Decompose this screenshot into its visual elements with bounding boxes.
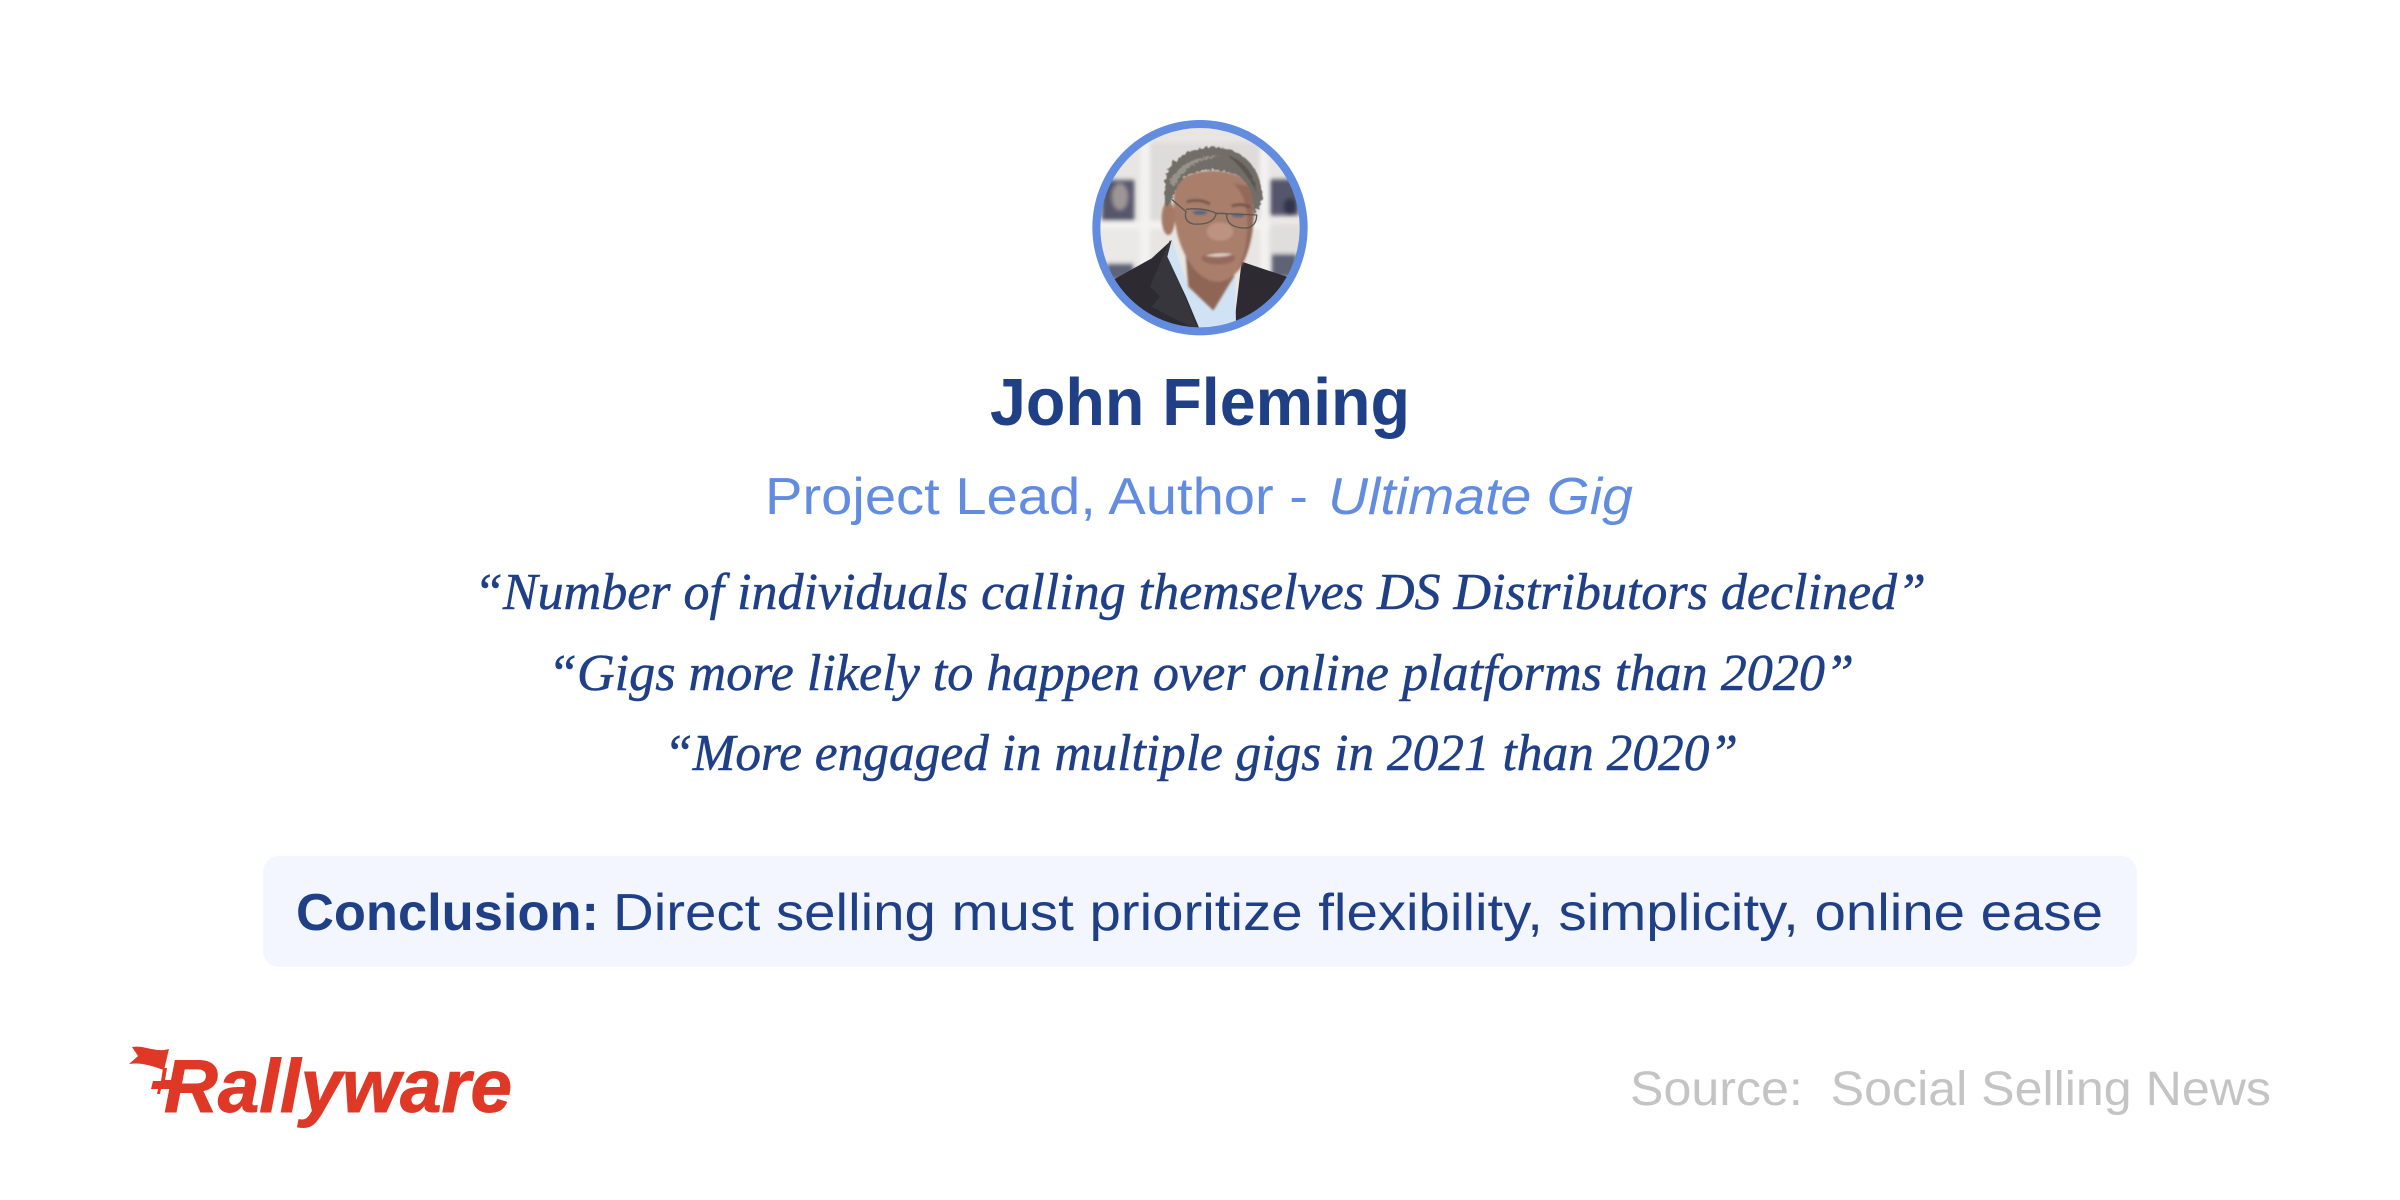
shirt	[1167, 240, 1236, 330]
glasses	[1172, 199, 1257, 228]
wordmark: Rallyware	[164, 1044, 512, 1128]
role subtitle	[765, 468, 1633, 526]
quote 1: “Number of individuals calling themselves DS Distributors declined”	[474, 564, 1926, 621]
icon: flag	[129, 1047, 175, 1094]
conclusion text: Direct selling must prioritize flexibility, simplicity, online ease	[613, 884, 2103, 942]
neck and face	[1162, 171, 1254, 311]
name heading: John Fleming	[990, 365, 1410, 440]
conclusion label: Conclusion:	[296, 884, 599, 942]
panel: conclusion	[263, 856, 2137, 967]
quote 3: “More engaged in multiple gigs in 2021 than 2020”	[664, 725, 1738, 782]
role subtitle: Project Lead, Author -	[765, 468, 1308, 526]
jacket	[1114, 240, 1287, 328]
logo: Rallyware	[129, 1044, 512, 1128]
portrait: John Fleming	[1090, 120, 1313, 340]
quote 2: “Gigs more likely to happen over online platforms than 2020”	[548, 645, 1854, 702]
source note: Source: Social Selling News	[1630, 1063, 2271, 1116]
role subtitle: Ultimate Gig	[1328, 468, 1633, 526]
quotes	[474, 564, 1926, 782]
hair	[1164, 147, 1262, 213]
